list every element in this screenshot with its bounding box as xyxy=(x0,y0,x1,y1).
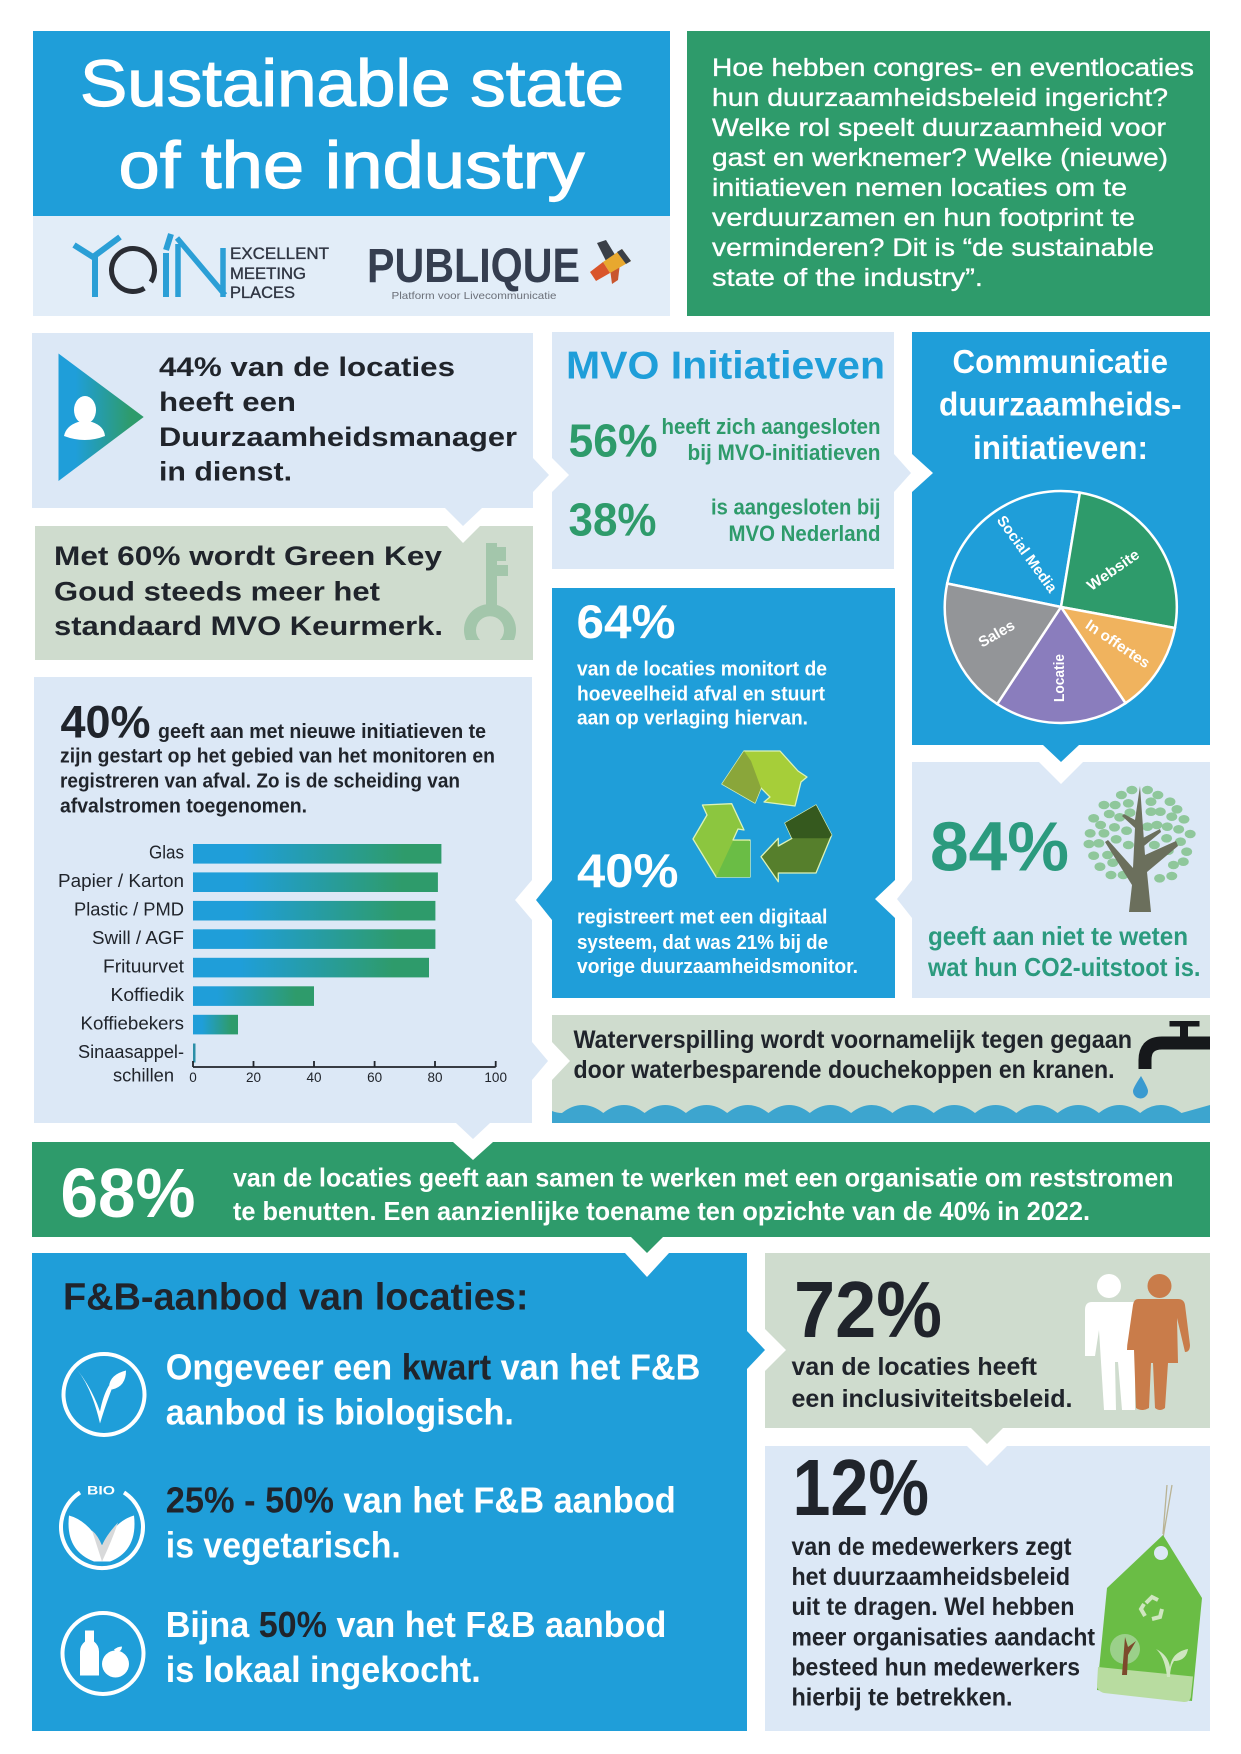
panel: intro text: hun duurzaamheidsbeleid ingericht? xyxy=(712,84,1168,112)
icon: tap and drop xyxy=(1133,1021,1210,1098)
pie chart: Social Media xyxy=(993,513,1061,597)
panel: MVO Initiatieven xyxy=(552,332,894,569)
panel: duurzaamheidsmanager xyxy=(32,333,533,508)
text: medewerkers: hierbij te betrekken. xyxy=(792,1684,1012,1712)
waves xyxy=(552,1105,1210,1123)
item: vegetarisch xyxy=(61,1480,676,1568)
item: lokaal xyxy=(62,1604,666,1694)
stat: 38%: is aangesloten bij xyxy=(711,495,880,520)
heading: communicatie xyxy=(939,343,1182,466)
icon: V leaf xyxy=(64,1354,144,1435)
item: biologisch: Ongeveer een kwart van het F&B xyxy=(166,1346,700,1388)
text: CO2 xyxy=(927,921,1200,982)
arrow: chart to water xyxy=(532,1042,570,1080)
bar chart: Swill / AGF xyxy=(92,928,184,948)
text: inclusiviteit: van de locaties heeft xyxy=(792,1353,1038,1381)
stat: 68%: 68% xyxy=(60,1154,196,1232)
icon: bio xyxy=(61,1484,143,1568)
arrow: inclusiviteit to medewerkers xyxy=(967,1428,1007,1466)
text: reststromen xyxy=(233,1162,1174,1226)
panel: logos xyxy=(33,216,670,316)
panel: 72% inclusiviteit xyxy=(765,1253,1210,1428)
text: 40% new initiatives: zijn gestart op het gebied van het monitoren en xyxy=(60,746,495,768)
logo: YOIN xyxy=(74,234,329,302)
text: inclusiviteit xyxy=(792,1353,1072,1413)
panel: intro text: Hoe hebben congres- en eventlocaties xyxy=(712,54,1194,82)
heading: MVO Initiatieven: MVO Initiatieven xyxy=(566,344,885,388)
heading: communicatie: Communicatie xyxy=(952,343,1168,380)
icon: bottle and apple xyxy=(62,1613,144,1694)
bar chart: Frituurvet xyxy=(103,956,184,976)
icon: tree xyxy=(1084,786,1196,912)
text: medewerkers xyxy=(792,1533,1096,1712)
title xyxy=(80,46,624,202)
stat: 40%: 40% xyxy=(577,844,678,897)
panel: intro text xyxy=(687,31,1210,316)
text: medewerkers: meer organisaties aandacht xyxy=(792,1624,1096,1652)
text: water: door waterbesparende douchekoppen en kranen. xyxy=(574,1056,1114,1084)
stat: 64%: van de locaties monitort de xyxy=(577,658,827,680)
item: biologisch xyxy=(64,1346,700,1435)
heading: communicatie: initiatieven: xyxy=(973,429,1148,466)
text: 44%: Duurzaamheidsmanager xyxy=(159,422,518,452)
stat: 40% xyxy=(577,844,858,978)
panel: intro text: gast en werknemer? Welke (nieuwe) xyxy=(712,144,1168,172)
text: 44%: in dienst. xyxy=(159,456,292,486)
bar chart: 80 xyxy=(427,1070,443,1085)
arrow: F&B to inclusiviteit xyxy=(747,1329,786,1371)
panel: afval monitoring xyxy=(552,588,895,998)
icon: green tag xyxy=(1097,1485,1202,1702)
item: lokaal: Bijna 50% van het F&B aanbod xyxy=(166,1604,666,1645)
arrow: afval to chart xyxy=(515,880,552,920)
text: reststromen: van de locaties geeft aan samen te werken met een organisatie om reststromen xyxy=(233,1162,1174,1192)
stat: 38%: MVO Nederland xyxy=(728,521,880,546)
arrow: manager to key xyxy=(445,508,482,543)
panel: CO2 xyxy=(912,762,1210,998)
stat: 38% xyxy=(568,494,880,546)
stat: 72%: 72% xyxy=(794,1265,942,1354)
text: Green Key: Goud steeds meer het xyxy=(54,576,380,606)
text: water xyxy=(574,1026,1132,1084)
stat: 64%: 64% xyxy=(576,595,676,648)
pie chart: In offertes xyxy=(1082,617,1153,672)
text: 40% new initiatives: geeft aan met nieuwe initiatieven te xyxy=(158,721,486,743)
bar chart xyxy=(58,843,507,1086)
panel: intro text: verminderen? Dit is “de sustainable xyxy=(712,234,1154,262)
text: 44%: 44% van de locaties xyxy=(159,352,455,382)
stat: 84%: 84% xyxy=(930,808,1069,886)
icon: key xyxy=(464,543,516,640)
bar chart: Koffiebekers xyxy=(80,1014,184,1034)
bar chart: Sinaasappel- xyxy=(78,1042,184,1062)
item: vegetarisch: is vegetarisch. xyxy=(166,1524,401,1566)
item: lokaal: is lokaal ingekocht. xyxy=(166,1649,481,1690)
stat: 56%: heeft zich aangesloten xyxy=(662,414,880,439)
stat: 64%: aan op verlaging hiervan. xyxy=(577,708,808,730)
panel: 40% waste chart xyxy=(34,677,532,1123)
text: medewerkers: besteed hun medewerkers xyxy=(792,1654,1080,1682)
stat: 40%: registreert met een digitaal xyxy=(577,906,828,928)
bar chart: schillen xyxy=(113,1066,174,1086)
title: Sustainable state xyxy=(80,46,624,120)
text: water: Waterverspilling wordt voornamelijk tegen gegaan xyxy=(574,1026,1132,1054)
text: medewerkers: van de medewerkers zegt xyxy=(792,1533,1072,1561)
panel: intro text: verduurzamen en hun footprint te xyxy=(712,204,1135,232)
panel: intro text: Welke rol speelt duurzaamheid voor xyxy=(712,114,1166,142)
pie chart xyxy=(945,491,1177,723)
pie chart: Website xyxy=(1084,546,1143,594)
bar chart: Koffiedik xyxy=(110,985,185,1005)
arrow: communicatie to CO2 xyxy=(1039,745,1083,784)
icon: bio: BIO xyxy=(87,1484,115,1498)
icon: recycle xyxy=(693,751,832,882)
item: biologisch: aanbod is biologisch. xyxy=(166,1392,514,1432)
arrow: reststromen to F&B xyxy=(625,1237,669,1277)
stat: 56% xyxy=(568,414,880,466)
text: inclusiviteit: een inclusiviteitsbeleid. xyxy=(792,1385,1072,1413)
text: 40% new initiatives: 40% xyxy=(60,697,150,748)
bar chart: 100 xyxy=(484,1070,507,1085)
pie chart: Sales xyxy=(976,617,1018,651)
pie chart: Locatie xyxy=(1051,654,1068,702)
stat: 12%: 12% xyxy=(792,1443,929,1532)
text: Green Key: standaard MVO Keurmerk. xyxy=(54,611,443,641)
text: 40% new initiatives xyxy=(60,697,495,818)
heading: F&B: F&B-aanbod van locaties: xyxy=(63,1276,528,1318)
panel: intro text: state of the industry”. xyxy=(712,264,983,292)
text: 44%: heeft een xyxy=(159,387,296,417)
item: vegetarisch: 25% - 50% van het F&B aanbod xyxy=(166,1480,676,1520)
text: reststromen: te benutten. Een aanzienlijke toename ten opzichte van de 40% in 2022. xyxy=(233,1196,1090,1226)
stat: 56%: 56% xyxy=(568,414,658,466)
arrow: chart to reststromen xyxy=(453,1123,493,1160)
bar chart: 0 xyxy=(189,1070,197,1085)
panel: communicatie xyxy=(912,332,1210,745)
bar chart: 20 xyxy=(246,1070,261,1085)
panel: F&B xyxy=(32,1253,747,1731)
stat: 64%: hoeveelheid afval en stuurt xyxy=(577,683,825,705)
bar chart: Papier / Karton xyxy=(58,871,184,891)
logo: YOIN: MEETING xyxy=(230,264,306,283)
panel: water xyxy=(552,1015,1210,1123)
text: 44% xyxy=(159,352,518,486)
panel: intro text: initiatieven nemen locaties om te xyxy=(712,174,1127,202)
arrow: manager to MVO xyxy=(533,458,569,492)
stat: 40%: systeem, dat was 21% bij de xyxy=(577,932,828,954)
text: medewerkers: uit te dragen. Wel hebben xyxy=(792,1593,1074,1621)
text: 40% new initiatives: afvalstromen toegenomen. xyxy=(60,796,307,818)
panel: 68% reststromen xyxy=(32,1142,1210,1237)
icon: triangle with person xyxy=(58,354,144,481)
stat: 40%: vorige duurzaamheidsmonitor. xyxy=(577,956,858,978)
bar chart: Plastic / PMD xyxy=(74,900,184,920)
bar chart: 40 xyxy=(306,1070,322,1085)
text: 40% new initiatives: registreren van afval. Zo is de scheiding van xyxy=(60,770,460,792)
panel: Green Key xyxy=(35,526,533,660)
logo: Publique: PUBLIQUE xyxy=(367,240,580,293)
logo: Publique: Platform voor Livecommunicatie xyxy=(392,290,557,302)
logo: YOIN: EXCELLENT xyxy=(230,244,329,263)
icon: people xyxy=(1085,1274,1190,1410)
arrow: CO2 to afval xyxy=(875,880,912,918)
text: CO2: wat hun CO2-uitstoot is. xyxy=(927,952,1200,982)
bar chart: 60 xyxy=(367,1070,382,1085)
stat: 56%: bij MVO-initiatieven xyxy=(688,440,880,465)
text: Green Key xyxy=(54,541,443,641)
text: Green Key: Met 60% wordt Green Key xyxy=(54,541,442,571)
text: CO2: geeft aan niet te weten xyxy=(928,921,1188,951)
panel: title xyxy=(33,31,670,216)
panel: 12% medewerkers xyxy=(765,1443,1210,1731)
arrow: MVO to communicatie xyxy=(894,454,933,492)
bar chart: Glas xyxy=(149,843,184,863)
text: medewerkers: het duurzaamheidsbeleid xyxy=(792,1563,1070,1591)
stat: 64% xyxy=(576,595,827,730)
title: of the industry xyxy=(118,128,584,202)
logo: YOIN: PLACES xyxy=(230,283,295,302)
stat: 38%: 38% xyxy=(568,494,656,546)
heading: communicatie: duurzaamheids- xyxy=(939,386,1182,422)
